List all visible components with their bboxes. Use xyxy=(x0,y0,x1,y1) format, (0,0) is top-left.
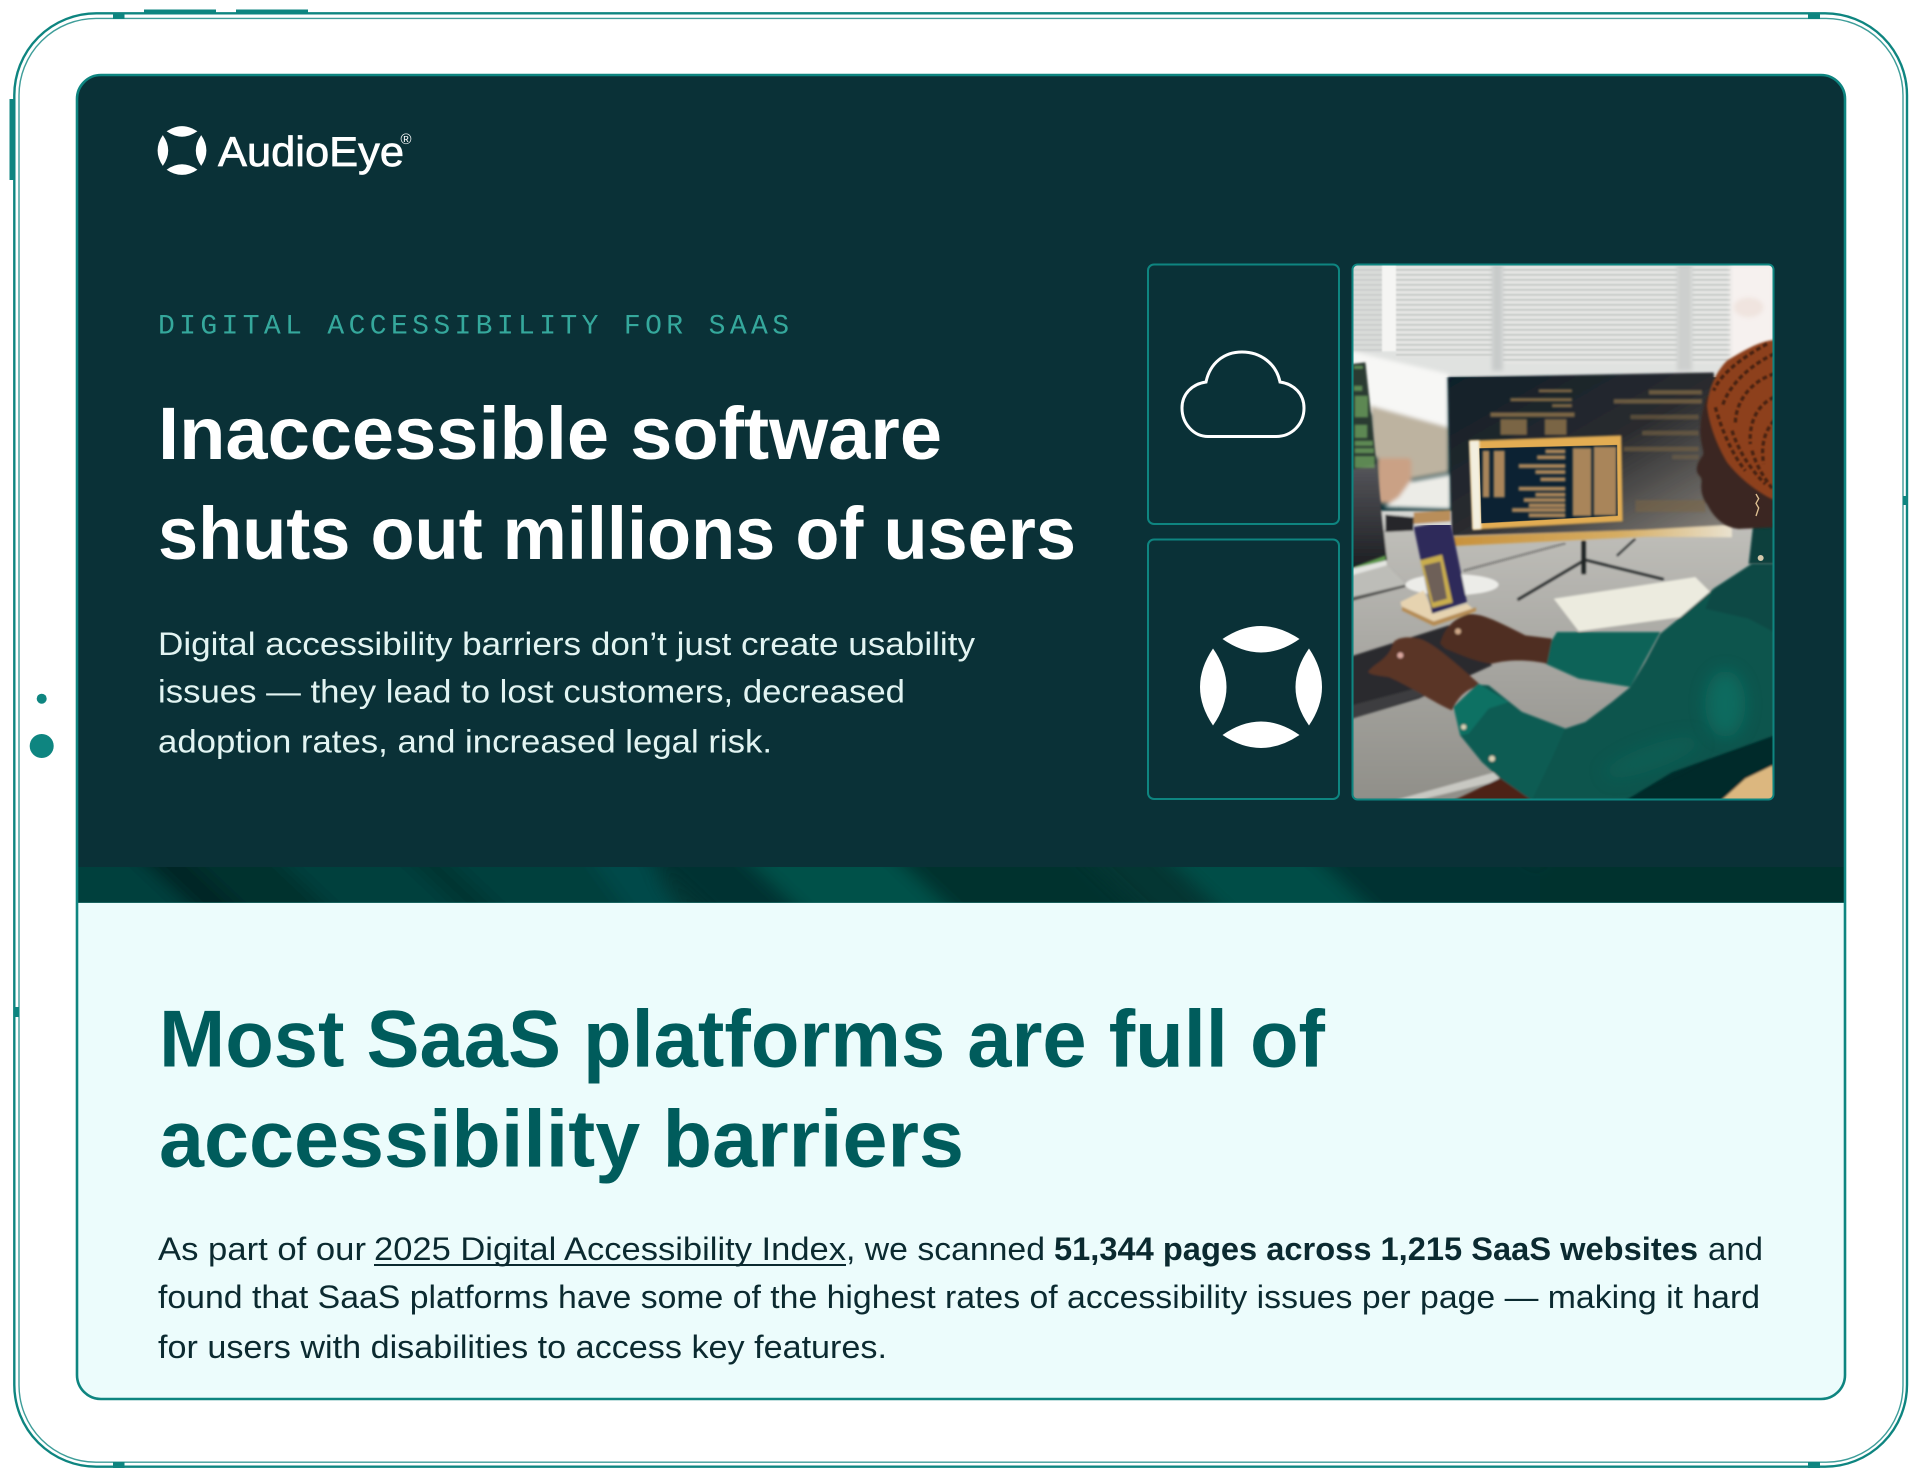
section heading: Most SaaS platforms are full of xyxy=(159,994,1326,1084)
collar xyxy=(1749,521,1774,564)
white peripherals xyxy=(1405,574,1499,595)
section description: found that SaaS platforms have some of the highest rates of accessibility issues per page — making it hard xyxy=(158,1279,1760,1315)
wordmark: AudioEye xyxy=(218,128,404,175)
section heading: accessibility barriers xyxy=(159,1094,964,1184)
section description xyxy=(158,1231,1763,1365)
photo: developer at desk with monitors xyxy=(1352,264,1775,802)
hero description xyxy=(158,626,976,760)
hero description: issues — they lead to lost customers, decreased xyxy=(158,674,905,710)
desk edge and floor xyxy=(1395,772,1500,802)
camera dots xyxy=(30,694,54,758)
logo: AudioEye xyxy=(158,126,412,175)
registered mark: ® xyxy=(400,131,412,148)
hair xyxy=(1707,340,1774,500)
hero description: Digital accessibility barriers don’t just create usability xyxy=(158,626,976,662)
link: report name: 2025 Digital Accessibility Index xyxy=(374,1231,846,1267)
front hand xyxy=(1368,637,1481,710)
white keyboard xyxy=(1554,577,1710,631)
texture band xyxy=(78,867,1844,903)
title xyxy=(158,392,1076,575)
rear hand xyxy=(1440,614,1552,664)
wood stand xyxy=(1400,590,1473,622)
window on monitor xyxy=(1469,435,1623,530)
card: cloud icon xyxy=(1148,264,1339,524)
hero description: adoption rates, and increased legal risk. xyxy=(158,724,772,760)
main monitor xyxy=(1448,372,1730,536)
shirt xyxy=(1456,588,1772,798)
icon: cloud xyxy=(1182,352,1304,436)
cuff and forearm xyxy=(1454,684,1556,798)
stand xyxy=(1464,539,1664,600)
tablet xyxy=(1414,520,1467,614)
face and neck xyxy=(1697,396,1774,529)
eyebrow: DIGITAL ACCESSIBILITY FOR SAAS xyxy=(158,312,789,342)
section description: As part of our xyxy=(158,1231,366,1267)
rear sleeve xyxy=(1545,632,1660,687)
section description: 51,344 pages across 1,215 SaaS websites xyxy=(1054,1231,1698,1267)
shirt highlight xyxy=(1705,671,1745,737)
left monitor xyxy=(1352,362,1387,569)
monitor code xyxy=(1490,389,1705,512)
section heading xyxy=(159,994,1326,1184)
black keyboard xyxy=(1352,625,1492,719)
title: Inaccessible software xyxy=(158,392,942,475)
buttons xyxy=(1461,724,1466,730)
section description: for users with disabilities to access key features. xyxy=(158,1329,887,1365)
section description: and xyxy=(1708,1231,1763,1267)
dark lower shirt xyxy=(1625,735,1774,800)
title: shuts out millions of users xyxy=(158,492,1076,575)
icon: logo mark xyxy=(158,126,206,175)
icon: logo mark large xyxy=(1200,626,1322,748)
chair xyxy=(1721,765,1775,800)
section description: , we scanned xyxy=(846,1231,1045,1267)
card: logo mark xyxy=(1148,540,1339,799)
